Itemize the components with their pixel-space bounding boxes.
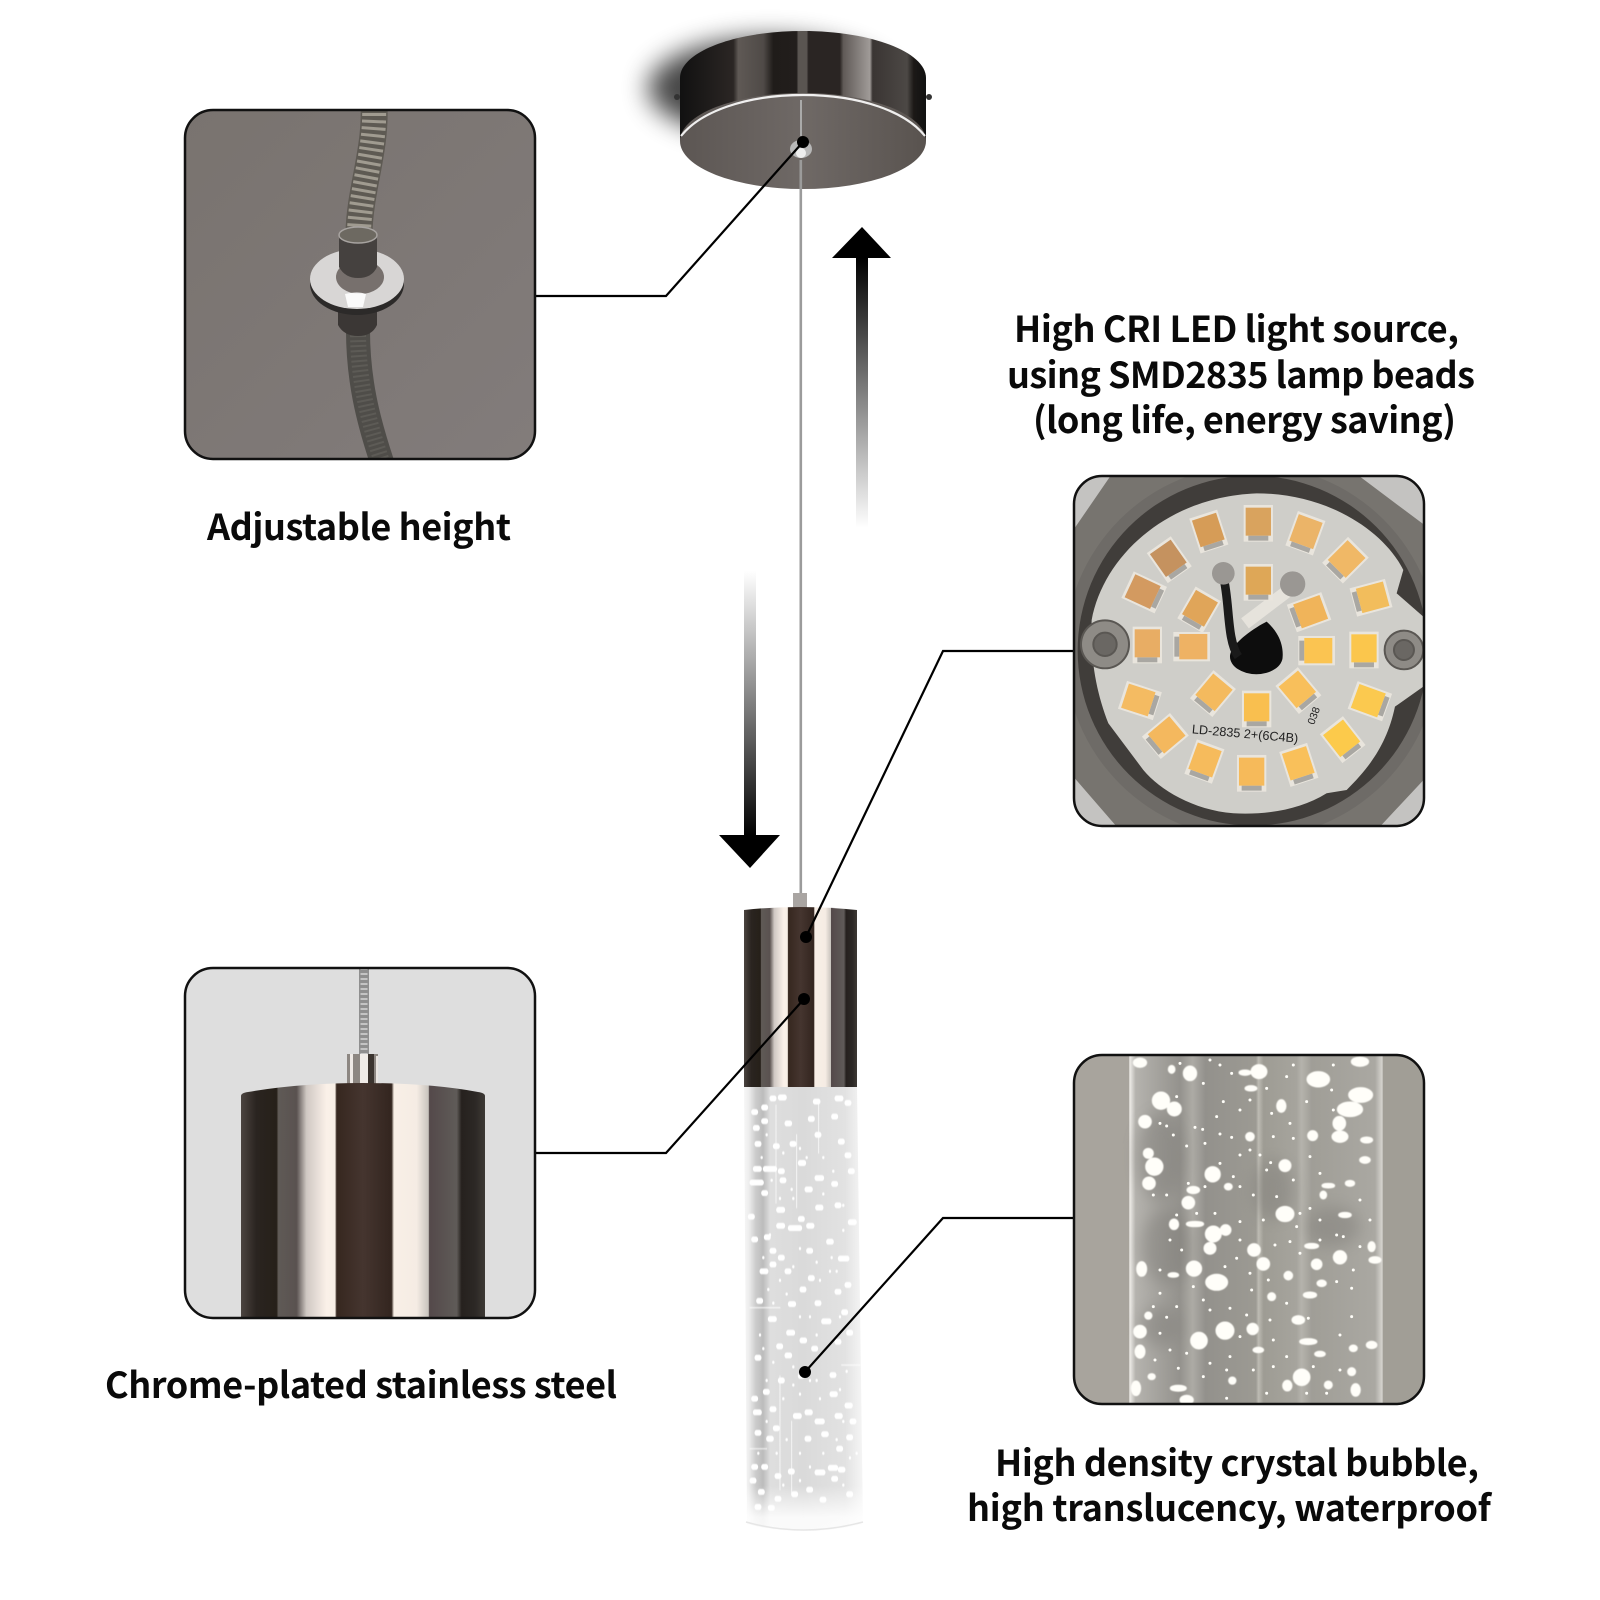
white wire <box>1245 587 1293 623</box>
panel: crystal bubble detail <box>1074 1055 1424 1405</box>
cable weave <box>358 330 382 462</box>
text: LED light source: using SMD2835 lamp beads <box>1007 347 1475 399</box>
leader: chrome-plated steel <box>535 999 804 1153</box>
center hole <box>1230 622 1283 674</box>
cord sleeve <box>347 1054 378 1084</box>
upper sleeve <box>339 235 377 278</box>
panel: LED lamp beads <box>1072 474 1426 828</box>
bubble crystal <box>740 1087 868 1540</box>
pendant lamp body <box>740 893 868 1540</box>
text: crystal bubble: high translucency, waterproof <box>967 1480 1493 1532</box>
screws <box>1081 620 1423 669</box>
cylinder <box>241 1083 485 1318</box>
cable braid <box>359 106 374 232</box>
LED beads, outer ring <box>1118 505 1393 792</box>
chrome ring <box>310 249 404 309</box>
sleeve opening <box>339 227 377 243</box>
braided cord <box>359 968 369 1054</box>
leader: LED light source <box>806 651 1074 937</box>
glass corners <box>1073 477 1427 827</box>
circuit board <box>1091 493 1423 814</box>
lower sleeve <box>338 312 377 336</box>
PCB marking: LD-2835 2+(6C4B) <box>1191 722 1299 746</box>
panel: LED lamp beads: 038 <box>1306 705 1323 726</box>
text: adjustable height: Adjustable height <box>206 499 511 551</box>
pendant cord <box>800 160 802 895</box>
leader lines <box>535 142 1074 1372</box>
panel: adjustable height detail <box>185 106 535 462</box>
LED beads, inner ring <box>1173 564 1335 727</box>
ring shadow rim <box>310 280 404 315</box>
wire <box>1223 577 1238 657</box>
leader: crystal bubble <box>805 1218 1074 1372</box>
arrow down <box>719 571 780 868</box>
text: crystal bubble: High density crystal bubble, <box>995 1435 1479 1487</box>
arrow up <box>832 227 891 528</box>
leader dots <box>797 136 812 1378</box>
text: LED light source: (long life, energy saving) <box>1033 392 1456 444</box>
text: crystal bubble <box>967 1435 1493 1532</box>
crystal column <box>1129 1055 1383 1405</box>
ring well <box>336 265 384 294</box>
dark inner ring <box>1078 476 1428 826</box>
bubbles <box>1132 1058 1380 1404</box>
metal ring <box>1076 478 1422 824</box>
text: chrome-plated steel: Chrome-plated stainless steel <box>105 1357 617 1409</box>
cable above fitting <box>359 106 374 232</box>
text: LED light source <box>1007 301 1475 444</box>
cord weave <box>360 968 368 1054</box>
text: LED light source: High CRI LED light source, <box>1014 301 1459 353</box>
solder points <box>1212 562 1305 597</box>
panel: chrome-plated steel detail <box>185 968 535 1318</box>
ceiling canopy <box>648 31 932 189</box>
column blotches <box>1137 1113 1360 1347</box>
cable below fitting <box>358 330 382 462</box>
leader: adjustable height <box>535 142 803 296</box>
metal cylinder <box>744 893 857 1087</box>
highlight <box>345 292 366 307</box>
tiny bubbles <box>1153 1060 1370 1398</box>
